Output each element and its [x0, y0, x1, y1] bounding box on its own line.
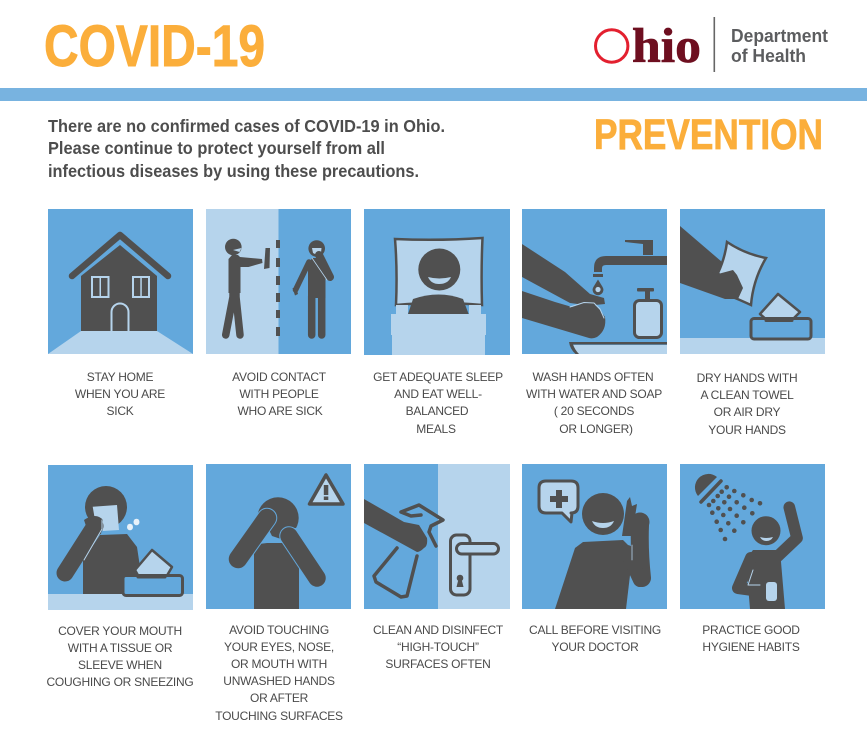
- caption: SLEEVE WHEN: [78, 658, 162, 672]
- caption: WASH HANDS OFTEN: [533, 370, 653, 384]
- caption: BALANCED: [406, 404, 469, 418]
- icon: tissue box: [751, 294, 811, 339]
- caption: A CLEAN TOWEL: [700, 388, 794, 402]
- panel: clean and disinfect: [364, 464, 510, 671]
- caption: GET ADEQUATE SLEEP: [373, 370, 503, 384]
- panel: good hygiene: [680, 464, 825, 654]
- icon: arm with spray bottle: [364, 499, 443, 597]
- intro text: Please continue to protect yourself from all: [48, 138, 385, 158]
- caption: SICK: [106, 404, 134, 418]
- panel: wash hands: [522, 209, 667, 436]
- caption: YOUR DOCTOR: [551, 640, 639, 654]
- icon: healthy person: [225, 239, 270, 335]
- caption: OR LONGER): [559, 422, 633, 436]
- icon: shower head and water: [695, 474, 762, 541]
- caption: WHEN YOU ARE: [75, 387, 165, 401]
- intro text: [48, 116, 445, 181]
- caption: YOUR HANDS: [708, 423, 786, 437]
- caption: CLEAN AND DISINFECT: [373, 623, 504, 637]
- panel: cover your mouth: [46, 465, 194, 689]
- icon: soap bottle: [634, 288, 662, 338]
- caption: [75, 370, 165, 418]
- icon: person in bed: [391, 238, 486, 355]
- icon: person coughing into tissue: [65, 486, 140, 594]
- caption: AVOID CONTACT: [232, 370, 327, 384]
- caption: WITH PEOPLE: [239, 387, 319, 401]
- icon: person on phone: [555, 493, 650, 609]
- caption: [697, 371, 797, 437]
- barrier dashes: [276, 240, 280, 336]
- panel: avoid contact: [206, 209, 351, 418]
- caption: [529, 623, 661, 654]
- caption: COUGHING OR SNEEZING: [46, 675, 194, 689]
- icon: faucet: [593, 240, 667, 295]
- caption: [526, 370, 662, 436]
- caption: AVOID TOUCHING: [229, 623, 329, 637]
- caption: OR MOUTH WITH: [231, 657, 327, 671]
- heading: prevention: PREVENTION: [594, 111, 823, 159]
- caption: WHO ARE SICK: [237, 404, 323, 418]
- panel: avoid touching face: [206, 464, 351, 723]
- caption: “HIGH-TOUCH”: [397, 640, 479, 654]
- icon: tissue box: [123, 550, 182, 596]
- caption: PRACTICE GOOD: [702, 623, 800, 637]
- title: COVID-19: [44, 14, 265, 79]
- caption: ( 20 SECONDS: [554, 404, 634, 418]
- icon: sick person: [292, 240, 330, 335]
- icon: door handle: [450, 535, 498, 595]
- logo: Ohio Department of Health: [596, 17, 828, 73]
- caption: TOUCHING SURFACES: [215, 709, 343, 723]
- caption: [46, 624, 194, 689]
- panel: call doctor: [522, 464, 667, 654]
- logo: Ohio Department of Health: of Health: [731, 46, 806, 66]
- panel: sleep and eat: [364, 209, 510, 436]
- caption: MEALS: [416, 422, 456, 436]
- icon: speech bubble with cross: [539, 481, 578, 522]
- caption: STAY HOME: [87, 370, 153, 384]
- caption: [702, 623, 800, 654]
- caption: UNWASHED HANDS: [223, 674, 335, 688]
- intro text: infectious diseases by using these precautions.: [48, 161, 419, 181]
- caption: AND EAT WELL-: [394, 387, 482, 401]
- caption: [215, 623, 343, 723]
- caption: DRY HANDS WITH: [697, 371, 797, 385]
- caption: CALL BEFORE VISITING: [529, 623, 661, 637]
- icon: sink: [569, 342, 667, 354]
- icon: towel and arms: [680, 226, 766, 305]
- caption: COVER YOUR MOUTH: [58, 624, 182, 638]
- icon: house: [72, 235, 168, 331]
- caption: [373, 623, 504, 671]
- icon: person touching face: [238, 497, 317, 609]
- caption: WITH WATER AND SOAP: [526, 387, 662, 401]
- caption: OR AFTER: [250, 691, 309, 705]
- logo: Ohio Department of Health: Department: [731, 26, 828, 46]
- caption: OR AIR DRY: [714, 405, 781, 419]
- panel: dry hands: [680, 209, 825, 437]
- caption: [232, 370, 327, 418]
- icon: person washing: [738, 507, 797, 609]
- panel: stay home: [48, 209, 193, 418]
- logo: Ohio Department of Health: hio: [632, 18, 701, 73]
- icon: warning triangle: [310, 475, 343, 504]
- caption: YOUR EYES, NOSE,: [224, 640, 334, 654]
- caption: SURFACES OFTEN: [385, 657, 491, 671]
- caption: [373, 370, 503, 436]
- caption: HYGIENE HABITS: [702, 640, 800, 654]
- icon: washing hands: [522, 244, 605, 338]
- caption: WITH A TISSUE OR: [68, 641, 173, 655]
- intro text: There are no confirmed cases of COVID-19 in Ohio.: [48, 116, 445, 136]
- header band: [0, 88, 867, 101]
